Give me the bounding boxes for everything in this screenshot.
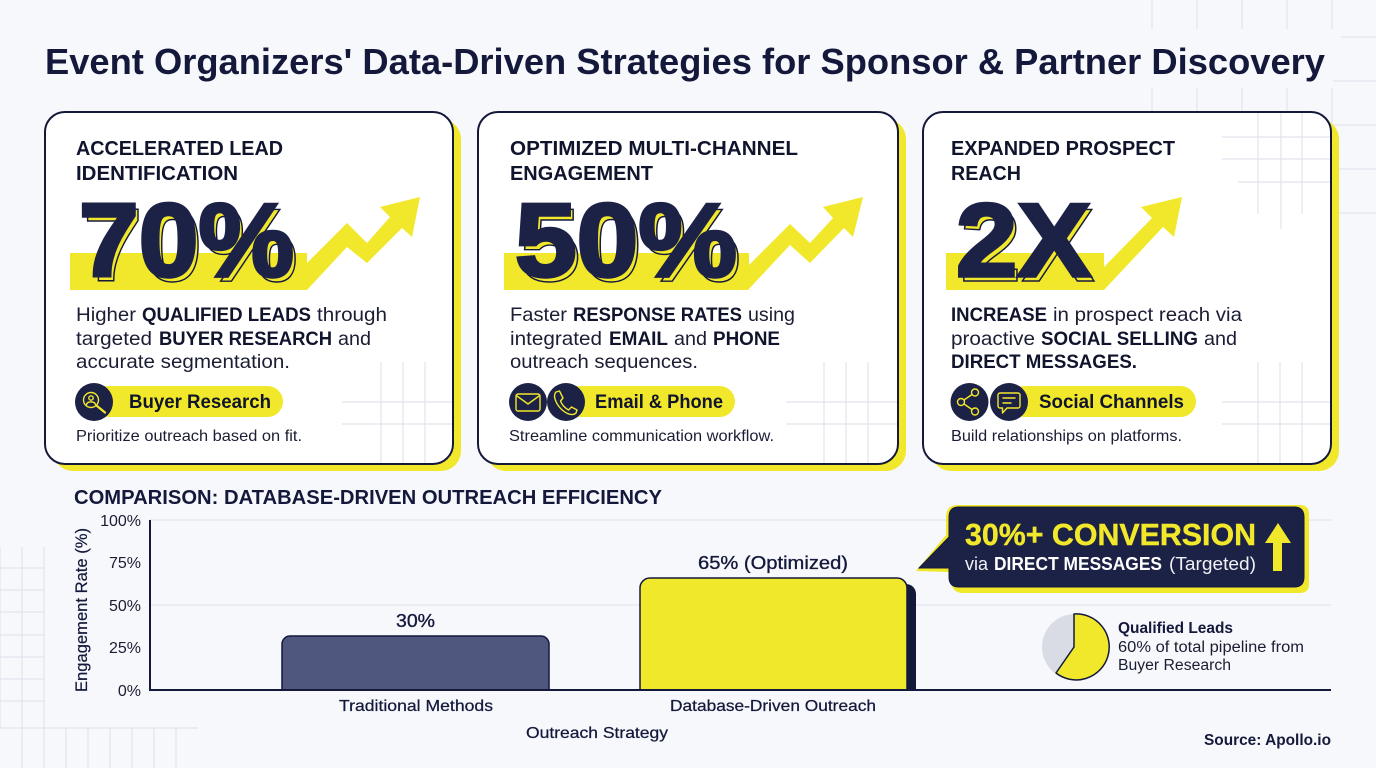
tag: buyer research: Buyer Research <box>129 391 271 413</box>
tag: buyer research <box>75 383 283 421</box>
description: targeted <box>76 328 152 350</box>
growth arrow band <box>70 197 420 290</box>
y axis labels: 50% <box>109 598 141 615</box>
heading: REACH <box>951 162 1021 185</box>
callout: 30%+ conversion: DIRECT MESSAGES <box>994 554 1162 574</box>
description: and <box>338 328 371 350</box>
heading: ACCELERATED LEAD <box>76 137 283 160</box>
description: in prospect reach via <box>1053 304 1242 326</box>
y axis labels <box>100 513 141 700</box>
y axis title: Engagement Rate (%) <box>73 528 91 692</box>
icon: phone <box>554 391 577 415</box>
section heading: comparison: COMPARISON: DATABASE-DRIVEN OUTREACH EFFICIENCY <box>74 486 662 509</box>
callout: 30%+ conversion <box>916 505 1309 593</box>
category labels: Database-Driven Outreach <box>670 698 876 715</box>
y axis labels: 25% <box>109 640 141 657</box>
heading <box>76 137 283 185</box>
heading: EXPANDED PROSPECT <box>951 137 1175 160</box>
callout: 30%+ conversion: via <box>965 554 989 574</box>
description: outreach sequences. <box>510 351 698 373</box>
description: integrated <box>510 328 602 350</box>
tag: email and phone <box>509 383 735 421</box>
description: INCREASE <box>951 304 1047 326</box>
growth arrow band <box>504 197 863 290</box>
description: and <box>674 328 707 350</box>
description <box>510 304 795 373</box>
description: Higher <box>76 304 137 326</box>
description: Faster <box>510 304 568 326</box>
big stat: 50%: 50% <box>515 183 737 299</box>
description: PHONE <box>713 328 780 350</box>
icon: envelope <box>516 394 540 411</box>
growth arrow band <box>946 197 1182 290</box>
description: and <box>1204 328 1237 350</box>
heading: OPTIMIZED MULTI-CHANNEL <box>510 137 798 160</box>
big stat: 2X: 2X <box>956 183 1091 299</box>
source: Source: Apollo.io <box>1204 732 1331 749</box>
bar: traditional methods <box>282 636 549 690</box>
note: Streamline communication workflow. <box>509 428 774 445</box>
description: through <box>317 304 387 326</box>
x axis title: Outreach Strategy <box>526 725 668 742</box>
pie chart: qualified leads <box>1042 614 1109 680</box>
callout: 30%+ conversion: (Targeted) <box>1169 554 1256 574</box>
icon: up arrow <box>1265 523 1291 571</box>
y axis labels: 100% <box>100 513 141 530</box>
big stat: 2X: 2X <box>960 188 1095 304</box>
pie legend: Buyer Research <box>1118 657 1231 674</box>
heading: IDENTIFICATION <box>76 162 238 185</box>
big stat: 70%: 70% <box>83 188 298 304</box>
bar value labels: 65% (Optimized) <box>698 552 848 573</box>
heading: ENGAGEMENT <box>510 162 653 185</box>
description: QUALIFIED LEADS <box>142 304 311 326</box>
big stat: 70%: 70% <box>79 183 294 299</box>
tag: email and phone: Email & Phone <box>595 391 723 413</box>
category labels: Traditional Methods <box>339 698 493 715</box>
description: BUYER RESEARCH <box>159 328 332 350</box>
description: accurate segmentation. <box>76 351 290 373</box>
panel: accelerated lead identification <box>45 112 461 471</box>
bar value labels <box>396 552 848 631</box>
bar chart <box>73 513 1331 742</box>
icon: magnifier with person <box>84 392 105 412</box>
callout: 30%+ conversion: 30%+ CONVERSION <box>965 517 1256 552</box>
pie legend: Qualified Leads <box>1118 620 1233 637</box>
heading <box>510 137 798 185</box>
tag: social channels <box>950 383 1196 421</box>
heading <box>951 137 1175 185</box>
pie legend <box>1118 620 1304 674</box>
icon: share <box>958 389 978 415</box>
panel: optimized multi-channel engagement <box>478 112 906 471</box>
pie legend: 60% of total pipeline from <box>1118 639 1304 656</box>
description: RESPONSE RATES <box>573 304 742 326</box>
description <box>951 304 1242 373</box>
title: Event Organizers' Data-Driven Strategies for Sponsor & Partner Discovery <box>45 41 1325 82</box>
category labels <box>339 698 876 715</box>
description: SOCIAL SELLING <box>1041 328 1198 350</box>
tag: social channels: Social Channels <box>1039 391 1184 413</box>
description: proactive <box>951 328 1035 350</box>
description: using <box>748 304 795 326</box>
description <box>76 304 387 373</box>
y axis labels: 0% <box>118 683 141 700</box>
bar: database-driven outreach <box>640 578 916 690</box>
y axis labels: 75% <box>109 555 141 572</box>
icon: chat bubble <box>998 393 1020 413</box>
bar value labels: 30% <box>396 610 435 631</box>
note: Build relationships on platforms. <box>951 428 1182 445</box>
big stat: 50%: 50% <box>519 188 741 304</box>
note: Prioritize outreach based on fit. <box>76 428 302 445</box>
description: DIRECT MESSAGES. <box>951 351 1137 373</box>
panel: expanded prospect reach <box>923 112 1339 471</box>
description: EMAIL <box>609 328 668 350</box>
